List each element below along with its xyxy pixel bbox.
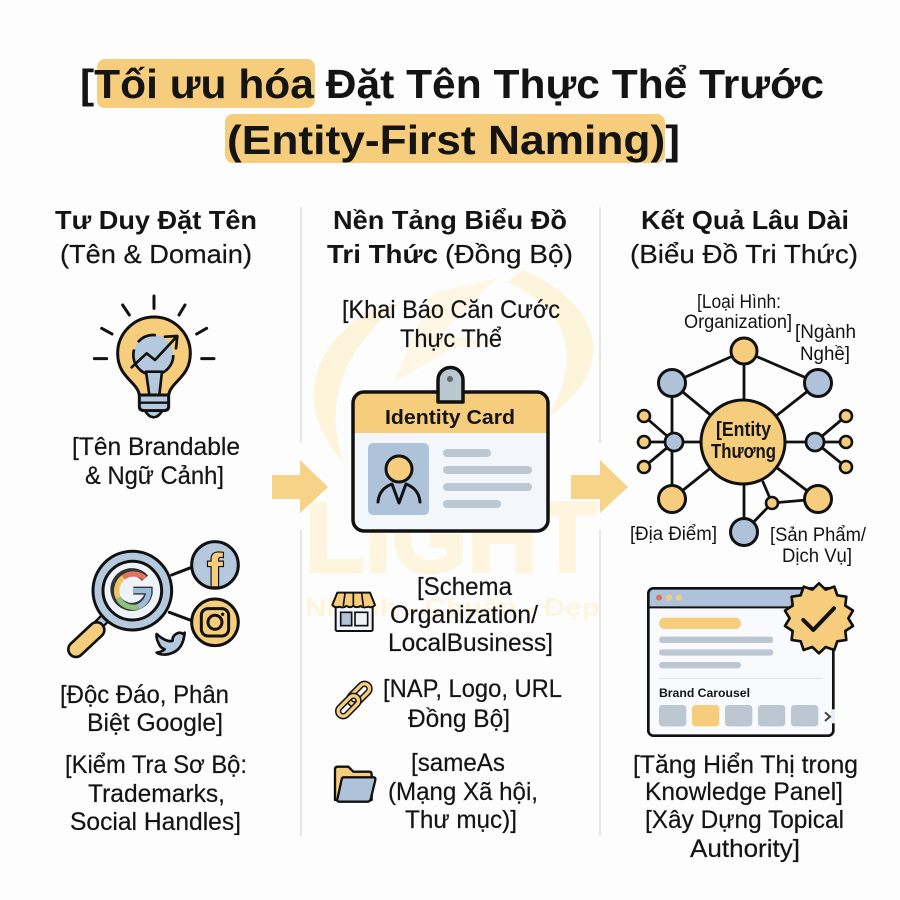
- text: knowledge panel and topical authority: Authority]: [690, 835, 800, 863]
- icon: browser with brand carousel and verified badge: [648, 583, 853, 736]
- icon: identity card: Identity Card: [385, 407, 515, 429]
- heading: knowledge graph foundation: (Đồng Bộ): [445, 239, 573, 269]
- text: schema: [388, 573, 553, 657]
- heading: naming mindset: (Tên & Domain): [60, 239, 252, 269]
- watermark logo: Nhanh - Chuẩn - Đẹp: [305, 594, 600, 622]
- label: products and services: [770, 525, 867, 567]
- heading: knowledge graph foundation: Nền Tảng Biểu Đồ: [333, 205, 567, 235]
- arrow: second to third column: [571, 460, 628, 513]
- text: knowledge panel and topical authority: [633, 751, 858, 863]
- icon: magnifier over Google and social networks: f: [207, 544, 223, 596]
- title: [Tối ưu hóa Đặt Tên Thực Thể Trước: [80, 61, 824, 107]
- chart: entity knowledge graph: [Entity: [716, 419, 772, 441]
- text: sameAs: [388, 749, 538, 834]
- text: preliminary checks: [65, 751, 247, 836]
- heading: long-term results: Kết Quả Lâu Dài: [641, 205, 849, 235]
- panel: knowledge graph foundation: [327, 205, 573, 834]
- text: preliminary checks: [Kiểm Tra Sơ Bộ:: [65, 751, 247, 779]
- heading: knowledge graph foundation: Tri Thức: [327, 239, 438, 269]
- text: sameAs: [sameAs: [411, 749, 505, 777]
- label: industry: Nghề]: [800, 344, 850, 365]
- watermark logo: [305, 270, 600, 622]
- panel: long-term results: [630, 205, 867, 863]
- icon: folder: [335, 767, 375, 802]
- chart: entity knowledge graph: [638, 338, 852, 546]
- label: industry: [795, 322, 856, 365]
- text: brandable name: & Ngữ Cảnh]: [85, 462, 224, 490]
- text: sameAs: Thư mục)]: [405, 806, 517, 834]
- heading: knowledge graph foundation: [327, 205, 573, 269]
- icon: storefront: [332, 593, 375, 631]
- text: knowledge panel and topical authority: Knowledge Panel]: [645, 778, 843, 806]
- text: sameAs: (Mạng Xã hội,: [388, 778, 538, 806]
- text: unique on Google: [60, 681, 229, 737]
- icon: identity card: [353, 368, 548, 531]
- text: entity identity declaration: [Khai Báo Căn Cước: [342, 296, 560, 324]
- text: unique on Google: [Độc Đáo, Phân: [60, 681, 229, 709]
- title: (Entity-First Naming)]: [227, 117, 680, 163]
- label: location: [Địa Điểm]: [630, 524, 717, 545]
- icon: light bulb with growth arrow: [94, 296, 214, 417]
- chart: entity knowledge graph: Thương: [711, 441, 776, 463]
- arrow: first to second column: [272, 460, 328, 513]
- heading: naming mindset: Tư Duy Đặt Tên: [55, 205, 257, 235]
- text: NAP sync: [NAP, Logo, URL: [383, 675, 562, 703]
- panel: naming mindset: [55, 205, 257, 836]
- icon: browser with brand carousel and verified badge: Brand Carousel: [659, 686, 750, 700]
- text: entity identity declaration: [342, 296, 560, 353]
- text: preliminary checks: Social Handles]: [70, 808, 241, 836]
- icon: magnifier over Google and social networks: [76, 542, 238, 655]
- text: schema: Organization/: [390, 601, 538, 629]
- text: entity identity declaration: Thực Thể: [400, 325, 502, 353]
- text: NAP sync: [383, 675, 562, 733]
- text: knowledge panel and topical authority: [Xây Dựng Topical: [645, 806, 844, 834]
- label: organization type: [684, 292, 792, 333]
- text: knowledge panel and topical authority: [Tăng Hiển Thị trong: [633, 751, 858, 779]
- heading: long-term results: (Biểu Đồ Tri Thức): [630, 239, 858, 269]
- text: brandable name: [72, 433, 240, 490]
- title: [80, 59, 824, 163]
- text: preliminary checks: Trademarks,: [88, 780, 225, 808]
- heading: long-term results: [630, 205, 858, 269]
- text: unique on Google: Biệt Google]: [87, 709, 223, 737]
- text: NAP sync: Đồng Bộ]: [408, 705, 510, 733]
- heading: naming mindset: [55, 205, 257, 269]
- text: schema: LocalBusiness]: [388, 629, 553, 657]
- watermark logo: LIGHT: [305, 482, 597, 594]
- label: organization type: Organization]: [684, 312, 792, 333]
- icon: chain link: [336, 682, 372, 718]
- text: schema: [Schema: [417, 573, 512, 601]
- label: products and services: [Sản Phẩm/: [770, 525, 867, 546]
- text: brandable name: [Tên Brandable: [72, 433, 240, 461]
- label: organization type: [Loại Hình:: [697, 292, 781, 313]
- label: industry: [Ngành: [795, 322, 856, 343]
- label: products and services: Dịch Vụ]: [782, 546, 852, 567]
